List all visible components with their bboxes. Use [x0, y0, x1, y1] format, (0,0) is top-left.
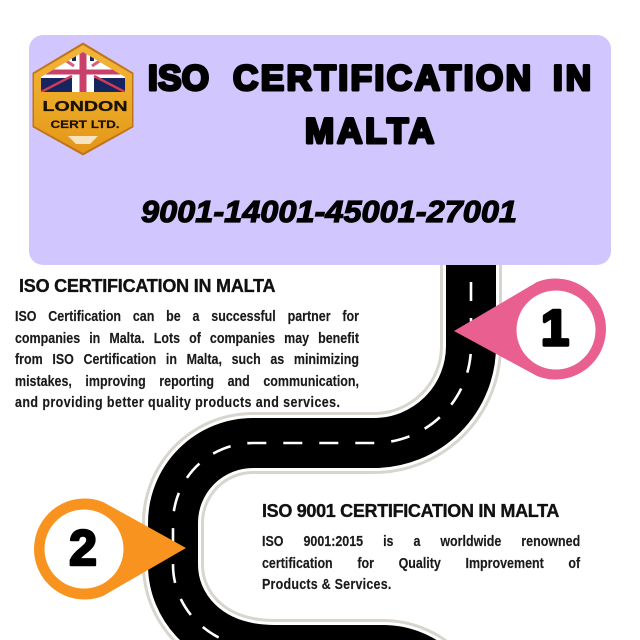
- road: [173, 250, 471, 640]
- pin 1: 1: [541, 300, 569, 356]
- subtitle: standards: 9001-14001-45001-27001: [141, 194, 517, 229]
- text block: section 1: mistakes, improving reporting and communication,: [15, 374, 359, 390]
- text block: section 2: Products & Services.: [262, 577, 392, 593]
- header panel: [29, 35, 611, 265]
- title: MALTA: [305, 112, 434, 151]
- text block: section 1: from ISO Certification in Malta, such as minimizing: [15, 352, 359, 368]
- heading: section 1: ISO CERTIFICATION IN MALTA: [19, 276, 275, 296]
- text block: section 1: companies in Malta. Lots of companies may benefit: [15, 330, 359, 346]
- text block: section 2: [262, 534, 580, 593]
- text block: section 2: ISO 9001:2015 is a worldwide renowned: [262, 534, 580, 550]
- text block: section 1: [15, 309, 359, 411]
- text block: section 1: and providing better quality products and services.: [15, 395, 340, 411]
- pin 1: [454, 278, 606, 380]
- pin 2: 2: [69, 520, 97, 576]
- icon: London Cert logo: [33, 43, 133, 155]
- icon: London Cert logo: CERT LTD.: [50, 119, 120, 131]
- title: IN: [553, 59, 591, 98]
- text block: section 2: certification for Quality Improvement of: [262, 556, 580, 572]
- heading: section 2: ISO 9001 CERTIFICATION IN MALTA: [262, 501, 559, 521]
- pin 2: [34, 498, 186, 599]
- title: ISO: [148, 59, 209, 98]
- icon: London Cert logo: LONDON: [42, 99, 128, 115]
- text block: section 1: ISO Certification can be a successful partner for: [15, 309, 359, 325]
- title: [148, 59, 591, 151]
- title: CERTIFICATION: [233, 59, 531, 98]
